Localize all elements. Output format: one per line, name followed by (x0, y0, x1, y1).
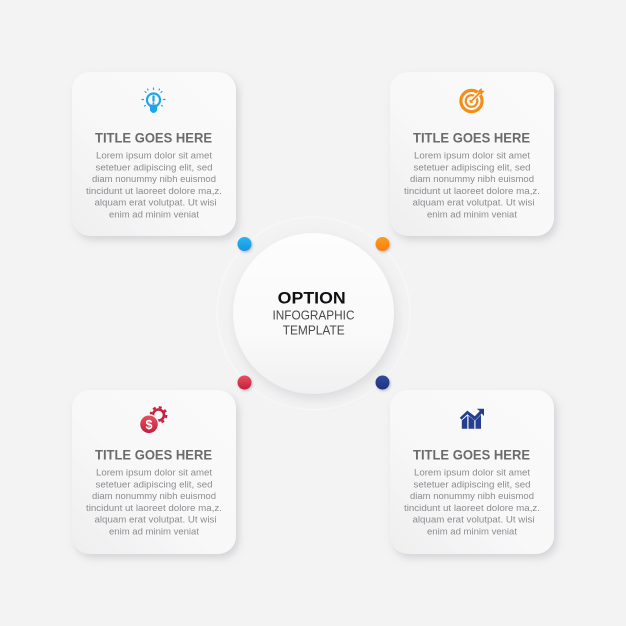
panel: top right card (390, 72, 554, 236)
icon: rising chart (460, 409, 484, 429)
central disc (233, 233, 394, 394)
marker: blue dot (238, 237, 252, 251)
body text: enim ad minim veniat (109, 526, 199, 538)
body text: setetuer adipiscing elit, sed (414, 479, 530, 490)
centre subtitle: TEMPLATE (283, 322, 345, 337)
centre subtitle: INFOGRAPHIC (272, 308, 354, 323)
card background (72, 390, 236, 554)
marker: navy dot (376, 376, 390, 390)
card background (390, 72, 554, 236)
body text: alquam erat volutpat. Ut wisi (94, 198, 216, 209)
icon: target (461, 88, 484, 112)
body text: tincidunt ut laoreet dolore ma,z. (86, 503, 222, 514)
body text: tincidunt ut laoreet dolore ma,z. (86, 186, 222, 197)
heading: TITLE GOES HERE (95, 447, 212, 463)
body text: enim ad minim veniat (427, 526, 517, 538)
body text: diam nonummy nibh euismod (410, 491, 534, 502)
body text: Lorem ipsum dolor sit amet (96, 468, 212, 478)
body text (86, 468, 222, 538)
body text (404, 150, 540, 220)
body text: tincidunt ut laoreet dolore ma,z. (404, 503, 540, 514)
centre subtitle (272, 308, 354, 337)
body text: diam nonummy nibh euismod (410, 174, 534, 185)
central ring (217, 217, 410, 410)
body text (86, 150, 222, 220)
marker: red dot (238, 376, 252, 390)
body text: diam nonummy nibh euismod (92, 174, 216, 185)
panel: bottom right card (390, 390, 554, 554)
panel: bottom left card (72, 390, 236, 554)
icon: light bulb (142, 88, 165, 113)
marker: orange dot (376, 237, 390, 251)
body text (404, 468, 540, 538)
centre heading: OPTION (278, 288, 346, 307)
icon: gear and dollar coin (139, 407, 166, 434)
body text: enim ad minim veniat (109, 210, 199, 220)
body text: tincidunt ut laoreet dolore ma,z. (404, 186, 540, 197)
heading: TITLE GOES HERE (413, 447, 530, 463)
body text: alquam erat volutpat. Ut wisi (412, 198, 534, 209)
body text: alquam erat volutpat. Ut wisi (412, 515, 534, 526)
heading: TITLE GOES HERE (413, 130, 530, 146)
body text: Lorem ipsum dolor sit amet (414, 150, 530, 162)
body text: setetuer adipiscing elit, sed (96, 162, 212, 173)
icon: gear and dollar coin: $ (146, 418, 153, 432)
heading: TITLE GOES HERE (95, 130, 212, 146)
panel: top left card (72, 72, 236, 236)
body text: setetuer adipiscing elit, sed (96, 479, 212, 490)
body text: Lorem ipsum dolor sit amet (96, 150, 212, 162)
body text: enim ad minim veniat (427, 210, 517, 220)
card background (72, 72, 236, 236)
card background (390, 390, 554, 554)
body text: setetuer adipiscing elit, sed (414, 162, 530, 173)
body text: alquam erat volutpat. Ut wisi (94, 515, 216, 526)
body text: Lorem ipsum dolor sit amet (414, 468, 530, 478)
body text: diam nonummy nibh euismod (92, 491, 216, 502)
